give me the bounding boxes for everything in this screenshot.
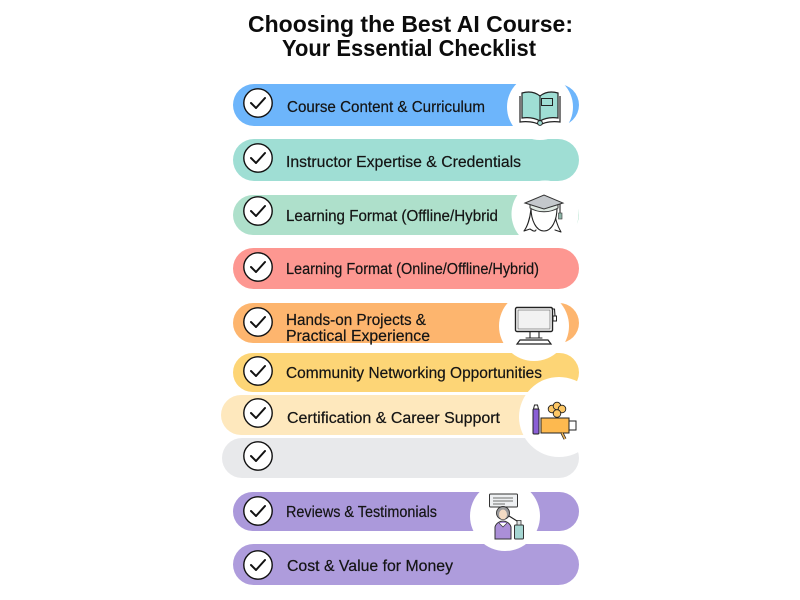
bar: certification and career <box>221 395 579 435</box>
white circle behind usb icon <box>519 377 599 457</box>
white circle behind reviewer icon <box>470 481 540 551</box>
bar: hands-on projects <box>233 303 579 343</box>
icon: graduate head with cap <box>524 195 563 232</box>
icon: open book <box>520 92 560 125</box>
bar: course content <box>233 84 579 126</box>
bar: reviews <box>233 492 579 531</box>
bar labels: Course Content & Curriculum <box>287 99 485 116</box>
bar: learning format online/offline/hybrid <box>233 248 579 289</box>
title: Choosing the Best AI Course: <box>248 11 573 37</box>
check icons <box>244 89 272 579</box>
bar labels: Reviews & Testimonials <box>286 504 437 521</box>
bar labels: Hands-on Projects & <box>286 312 427 329</box>
white circle behind book icon <box>507 74 573 140</box>
bar labels: Learning Format (Offline/Hybrid <box>286 208 498 225</box>
title: Your Essential Checklist <box>282 35 536 61</box>
bar labels: Cost & Value for Money <box>287 558 453 575</box>
icon: desktop monitor <box>516 308 556 344</box>
bar labels: Community Networking Opportunities <box>286 365 542 382</box>
white circle behind graduate icon <box>512 180 578 248</box>
icon: usb stick, marker and flower <box>533 402 576 439</box>
bar labels: Learning Format (Online/Offline/Hybrid) <box>286 261 539 278</box>
white circle behind monitor icon <box>499 291 569 361</box>
bar labels <box>286 99 542 575</box>
bar: community networking <box>233 353 579 392</box>
title <box>248 11 573 61</box>
bar labels: Instructor Expertise & Credentials <box>286 154 521 171</box>
bar labels: Practical Experience <box>286 328 430 345</box>
bar: learning format offline/hybrid <box>233 195 579 235</box>
bar: cost and value <box>233 544 579 585</box>
bar: instructor expertise <box>233 139 579 181</box>
bar: blank grey <box>222 438 579 478</box>
bar labels: Certification & Career Support <box>287 410 501 427</box>
icon: reviewer with speech bubble <box>490 494 524 539</box>
